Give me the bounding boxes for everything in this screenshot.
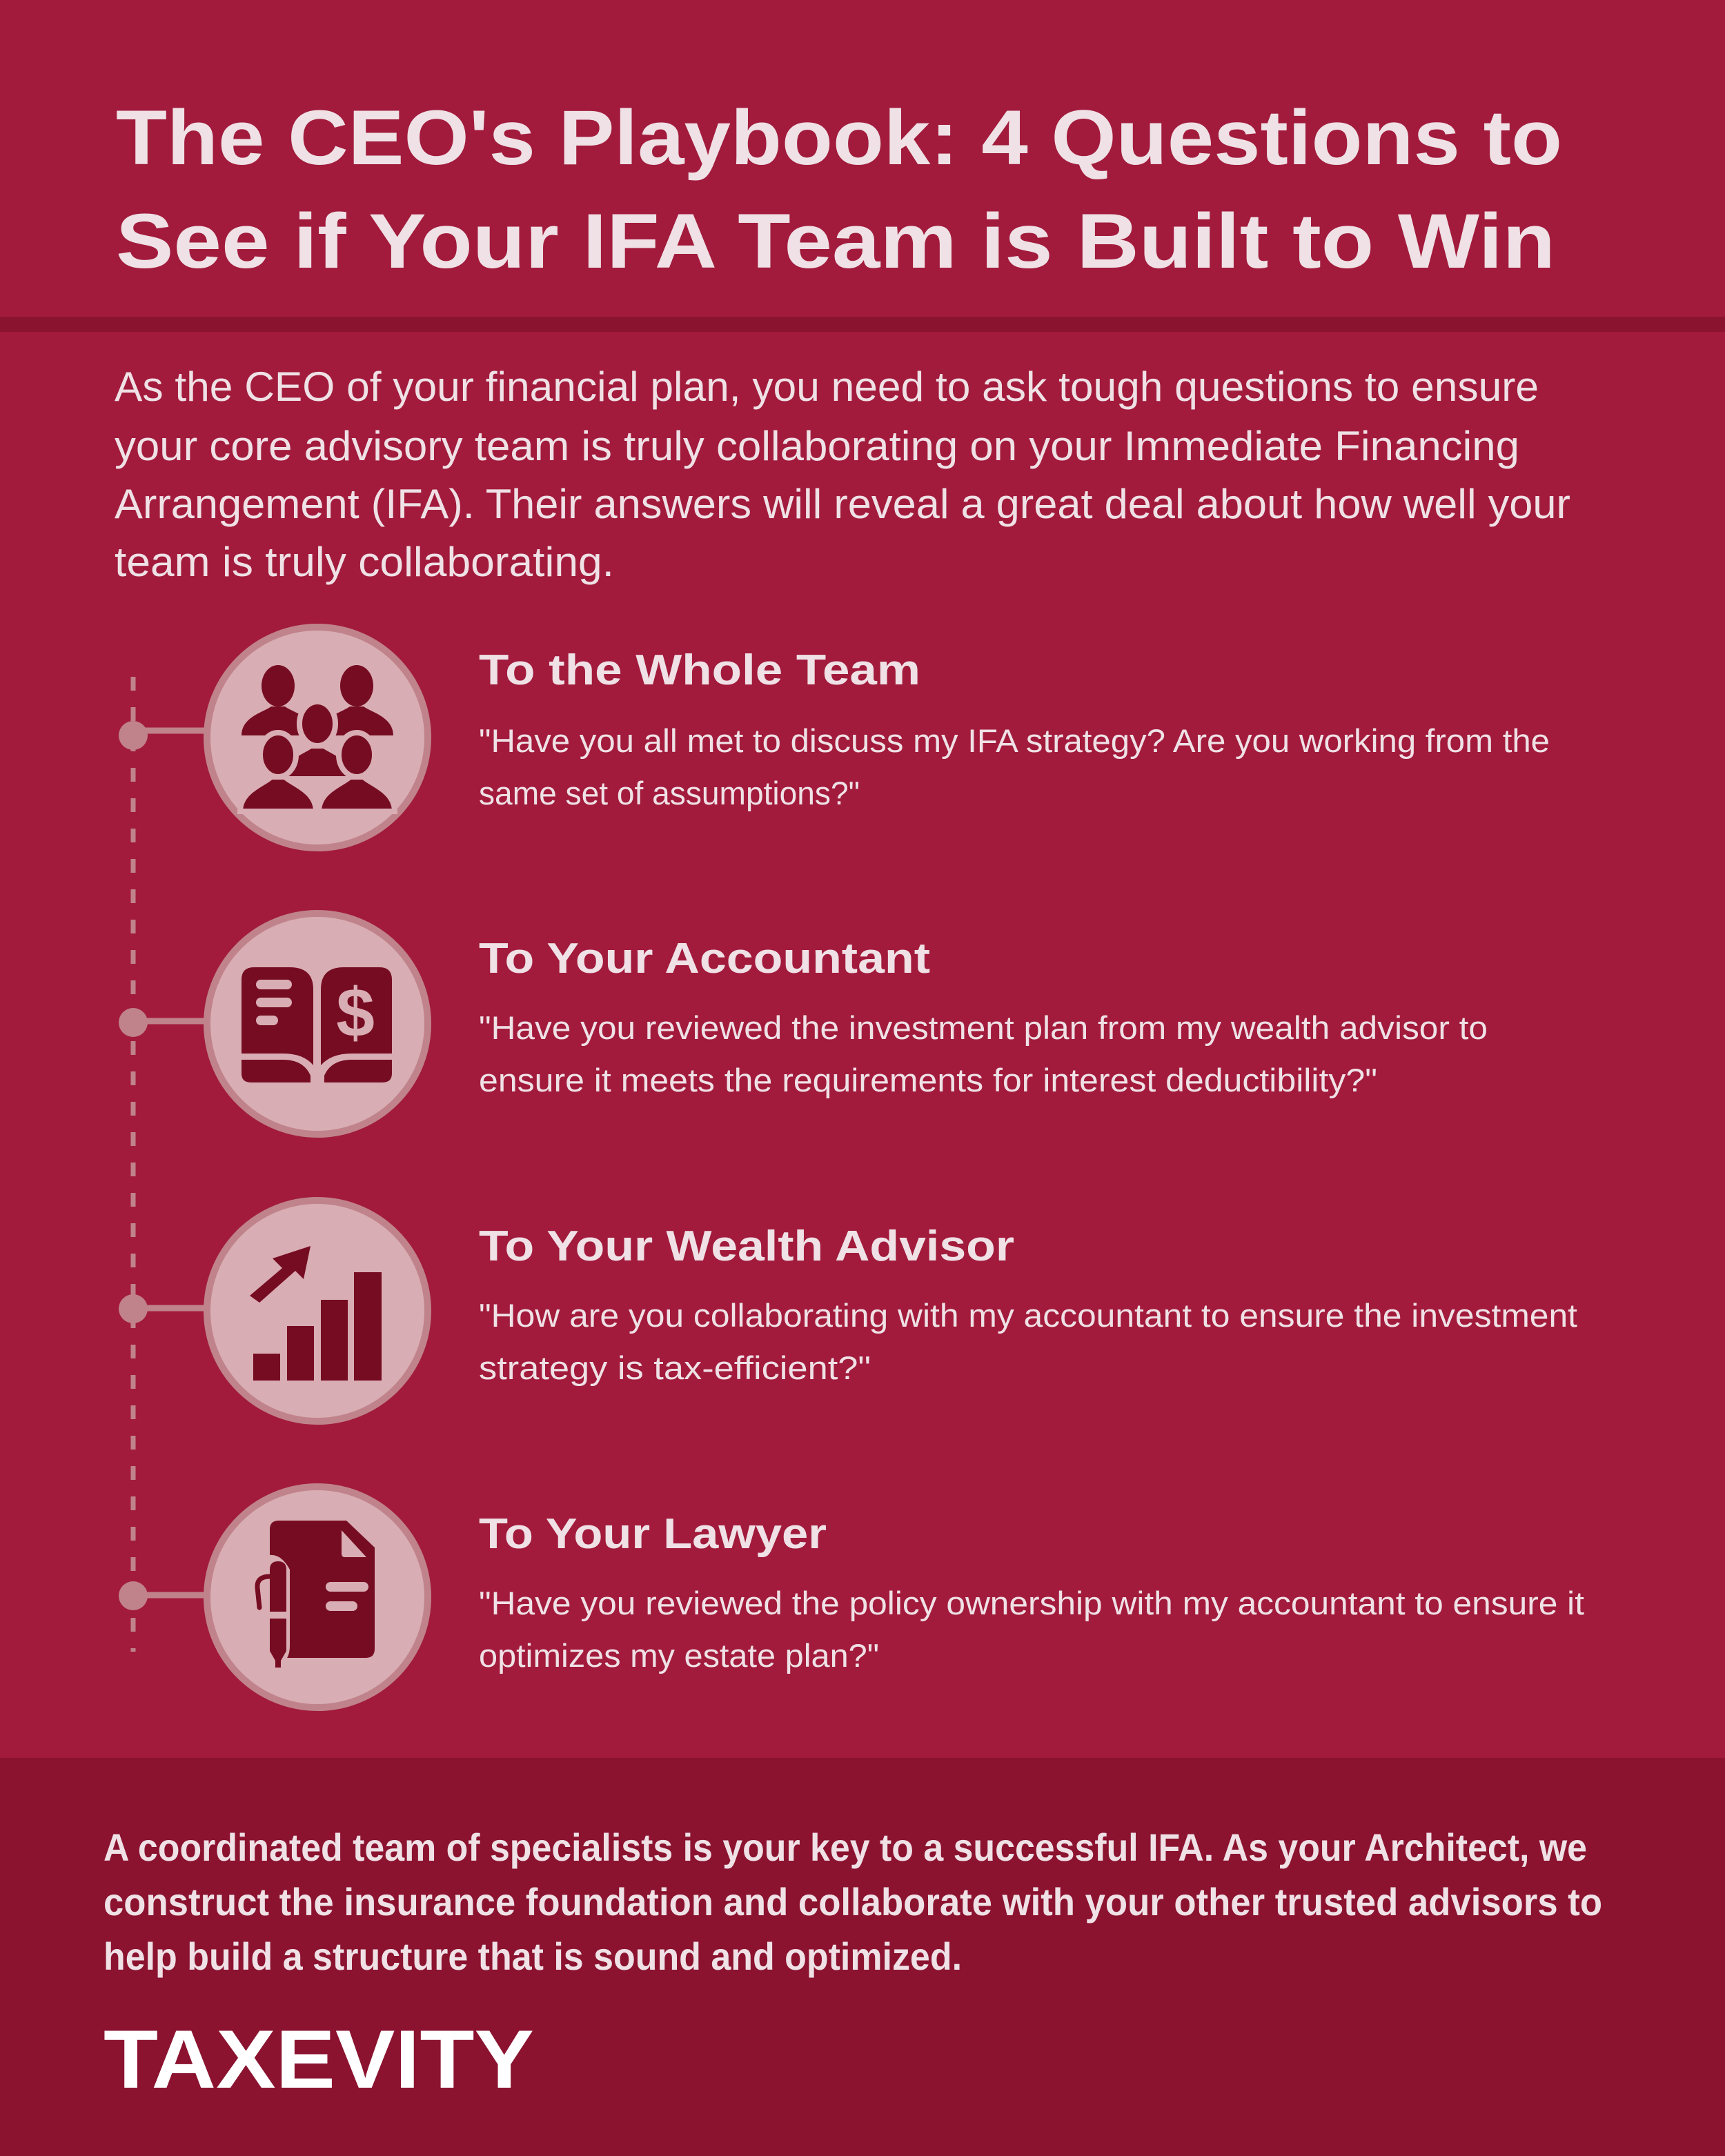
quote 1 — [479, 722, 1550, 811]
icon: book with dollar: $ — [336, 974, 375, 1051]
intro paragraph: As the CEO of your financial plan, you need to ask tough questions to ensure — [115, 364, 1539, 410]
intro paragraph — [115, 364, 1570, 585]
quote 3: "How are you collaborating with my accountant to ensure the investment — [479, 1297, 1577, 1334]
footer text: A coordinated team of specialists is your key to a successful IFA. As your Architect, we — [103, 1826, 1587, 1869]
quote 4 — [479, 1585, 1584, 1674]
title: See if Your IFA Team is Built to Win — [116, 198, 1555, 284]
icon: document and pen — [252, 1521, 375, 1668]
quote 2: "Have you reviewed the investment plan from my wealth advisor to — [479, 1009, 1488, 1046]
item 3: wealth advisor — [119, 1200, 1577, 1421]
logo: TAXEVITY — [103, 2013, 534, 2106]
quote 3 — [479, 1297, 1577, 1386]
intro paragraph: your core advisory team is truly collaborating on your Immediate Financing — [115, 423, 1519, 469]
title: The CEO's Playbook: 4 Questions to — [116, 95, 1562, 181]
icon: book with dollar — [241, 967, 392, 1082]
quote 3: strategy is tax-efficient?" — [479, 1349, 871, 1386]
quote 4: optimizes my estate plan?" — [479, 1637, 879, 1674]
heading 2: To Your Accountant — [479, 935, 930, 982]
heading 1: To the Whole Team — [479, 646, 920, 694]
quote 2 — [479, 1009, 1488, 1098]
item 2: accountant — [119, 913, 1488, 1134]
item 1: whole team — [119, 627, 1550, 848]
icon: growth chart — [250, 1246, 382, 1381]
heading 4: To Your Lawyer — [479, 1510, 827, 1558]
item 4: lawyer — [119, 1487, 1584, 1708]
intro paragraph: Arrangement (IFA). Their answers will reveal a great deal about how well your — [115, 481, 1570, 527]
quote 2: ensure it meets the requirements for interest deductibility?" — [479, 1062, 1377, 1098]
icon: people — [240, 665, 395, 811]
quote 4: "Have you reviewed the policy ownership with my accountant to ensure it — [479, 1585, 1584, 1621]
title — [116, 95, 1562, 284]
footer text: help build a structure that is sound and optimized. — [103, 1935, 962, 1978]
footer text: construct the insurance foundation and collaborate with your other trusted advisors to — [103, 1880, 1602, 1923]
quote 1: same set of assumptions?" — [479, 775, 860, 811]
intro paragraph: team is truly collaborating. — [115, 539, 614, 585]
quote 1: "Have you all met to discuss my IFA strategy? Are you working from the — [479, 722, 1550, 759]
footer text — [103, 1826, 1602, 1978]
timeline dashed line — [131, 677, 135, 1652]
heading 3: To Your Wealth Advisor — [479, 1223, 1014, 1270]
footer panel — [0, 1758, 1725, 2156]
